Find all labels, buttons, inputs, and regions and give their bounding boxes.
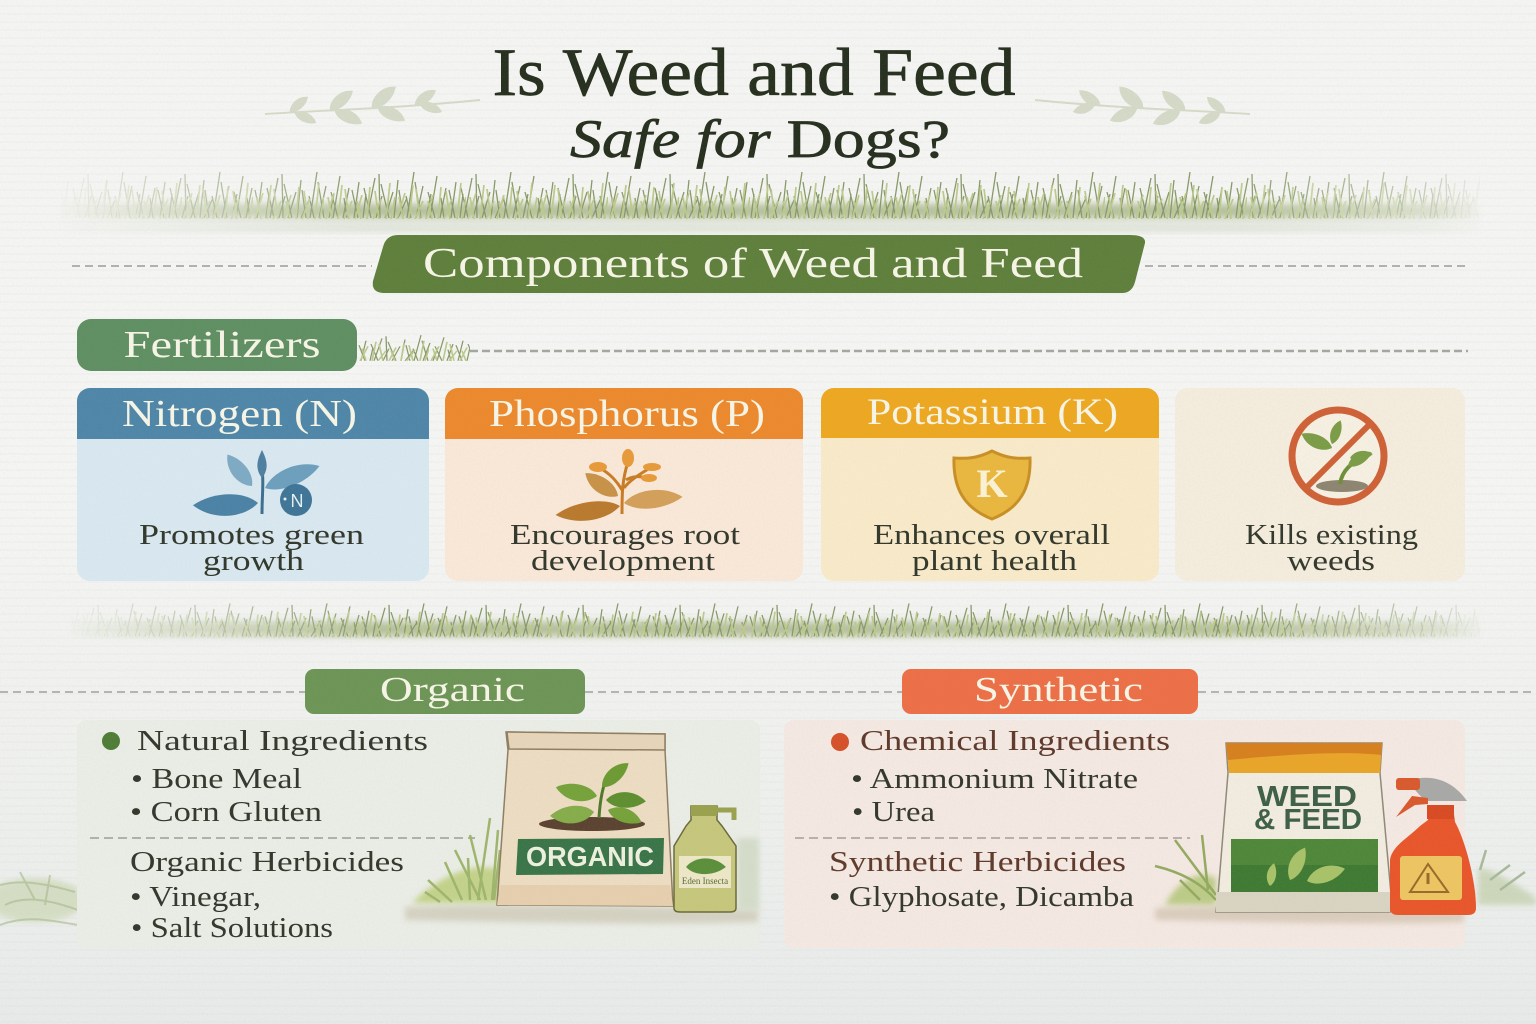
illustration: weed and feed bag: & FEED	[1254, 804, 1362, 836]
card: weed killer: Kills existing	[1245, 520, 1418, 551]
grass tuft: behind bottle	[737, 838, 759, 910]
title: Safe for Dogs?	[570, 109, 950, 169]
text: organic herbicides: • Vinegar,	[130, 882, 261, 913]
text: organic herbicides: • Salt Solutions	[131, 913, 333, 944]
decorative grass: lower left	[0, 872, 85, 925]
card: potassium	[821, 388, 1159, 581]
section banner: components	[373, 235, 1145, 293]
card: phosphorus: Encourages root	[510, 520, 740, 551]
illustration: weed and feed bag: WEED	[1257, 781, 1357, 813]
card: phosphorus: Phosphorus (P)	[489, 393, 765, 435]
tab: organic: Organic	[380, 670, 525, 709]
tab: organic	[305, 669, 585, 714]
icon: blue leaves with N: N	[290, 491, 304, 511]
grass strip: top	[60, 170, 1480, 232]
section banner: components: Components of Weed and Feed	[423, 241, 1083, 287]
grass tuft beside fertilizers tab	[358, 334, 470, 361]
decorative sprig: right	[1035, 83, 1250, 129]
card: weed killer: weeds	[1287, 546, 1375, 577]
card: phosphorus: development	[531, 546, 715, 577]
text: synthetic herbicides	[829, 847, 1134, 913]
card: nitrogen: Nitrogen (N)	[122, 393, 357, 435]
text: chemical ingredients: • Urea	[852, 797, 935, 828]
illustration: weed and feed bag	[1216, 743, 1392, 912]
heading tab: fertilizers	[77, 319, 357, 371]
ground: organic	[405, 905, 758, 924]
text: organic herbicides	[130, 847, 404, 944]
text: natural ingredients: • Corn Gluten	[130, 797, 322, 828]
card: nitrogen	[77, 388, 429, 581]
icon: blue leaves with N	[193, 450, 323, 517]
illustration: organic bottle	[674, 805, 736, 912]
tab: synthetic: Synthetic	[974, 670, 1143, 709]
grass strip: middle	[70, 602, 1480, 639]
card: potassium: Potassium (K)	[867, 392, 1118, 433]
text: natural ingredients: • Bone Meal	[131, 764, 302, 795]
text: organic herbicides: Organic Herbicides	[130, 847, 404, 878]
card: weed killer	[1175, 388, 1465, 581]
illustration: organic bag	[497, 732, 673, 906]
illustration: organic bottle: Eden Insecta	[682, 876, 728, 886]
decorative sprig: left	[265, 82, 480, 128]
panel: organic	[77, 720, 760, 948]
tab: synthetic	[902, 669, 1198, 714]
card: potassium: plant health	[912, 546, 1077, 577]
text: chemical ingredients: Chemical Ingredients	[860, 726, 1170, 757]
grass tuft: organic	[412, 818, 500, 903]
title: Is Weed and Feed	[492, 34, 1016, 110]
grass tuft: right of bottle	[1478, 850, 1536, 905]
card: nitrogen: growth	[203, 546, 304, 577]
illustration: spray bottle	[1390, 778, 1476, 915]
ground: synthetic	[1155, 906, 1464, 924]
text: natural ingredients	[102, 726, 428, 828]
heading tab: fertilizers: Fertilizers	[124, 324, 320, 366]
text: chemical ingredients: • Ammonium Nitrate	[851, 764, 1138, 795]
text: natural ingredients: Natural Ingredients	[137, 726, 428, 757]
card: nitrogen: Promotes green	[139, 520, 364, 551]
title	[492, 34, 1016, 169]
illustration: organic bag: ORGANIC	[526, 841, 654, 872]
grass tuft: synthetic	[1155, 835, 1216, 905]
card: phosphorus	[445, 388, 803, 581]
icon: orange plant	[554, 449, 683, 525]
panel: synthetic	[784, 720, 1536, 948]
icon: shield K: K	[976, 461, 1008, 506]
text: synthetic herbicides: • Glyphosate, Dicamba	[829, 882, 1134, 913]
icon: shield K	[954, 451, 1030, 519]
card: potassium: Enhances overall	[873, 520, 1110, 551]
text: chemical ingredients	[831, 726, 1170, 828]
text: synthetic herbicides: Synthetic Herbicides	[829, 847, 1126, 878]
icon: no weeds sign	[1292, 410, 1384, 502]
